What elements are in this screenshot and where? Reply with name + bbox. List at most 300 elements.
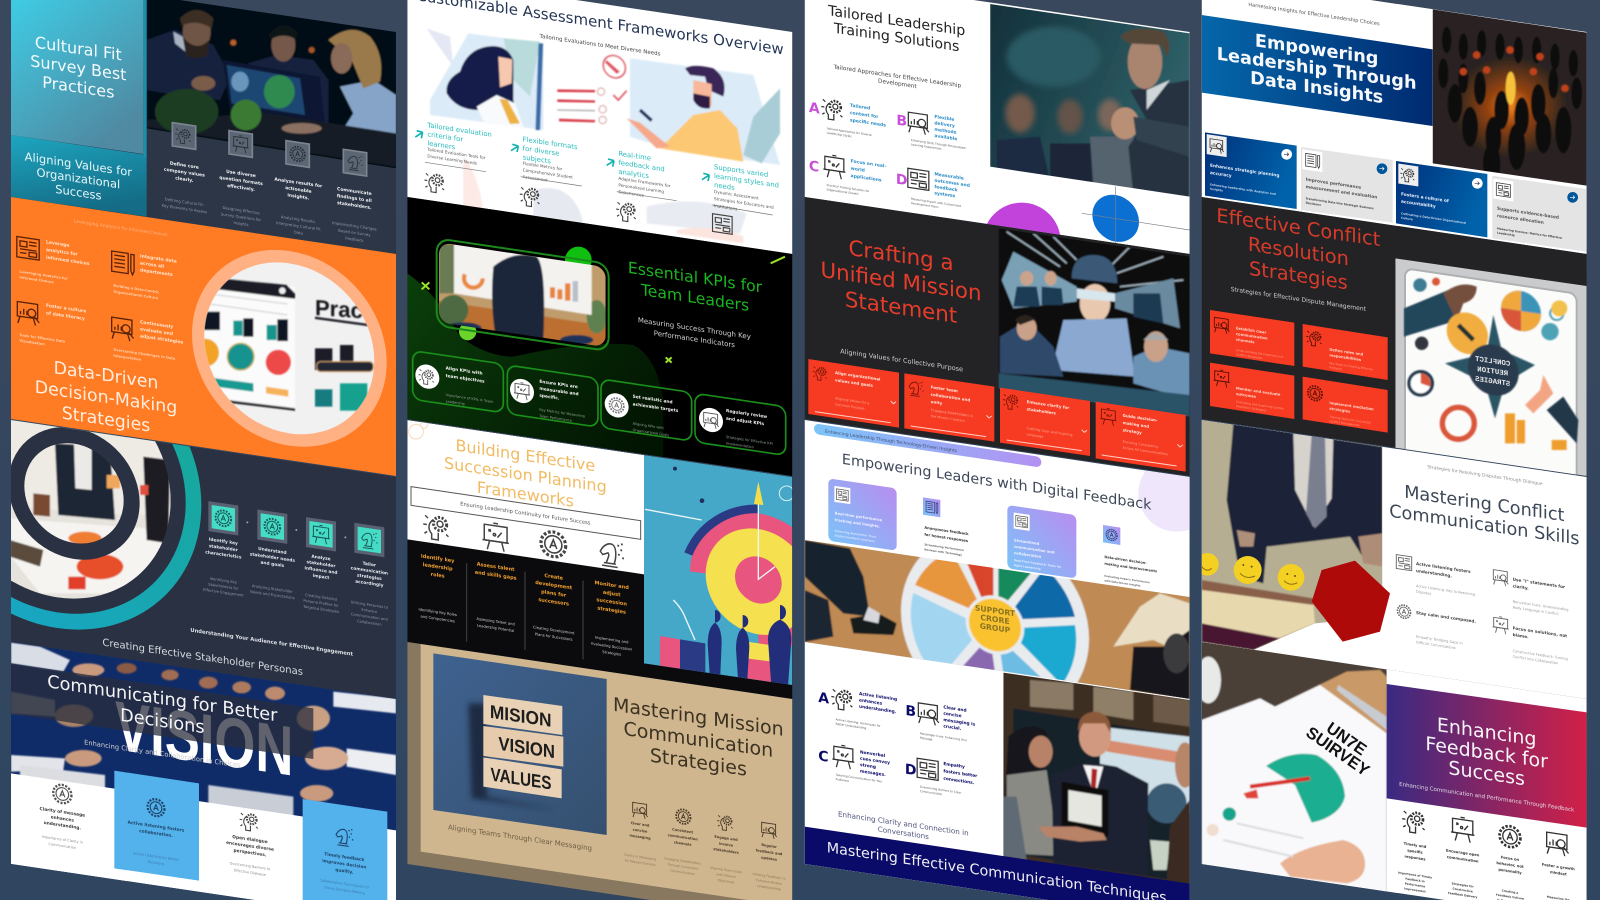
title band: Enhancing Feedback for Success: Success [1448,757,1525,790]
card: Timely feedback: quality. [335,867,353,875]
item: Identify key stakeholder characteristics: stakeholder [209,544,238,553]
slide: Creating Effective Stakeholder Personas [11,420,396,699]
heading: Crafting a Unified Mission Statement: Crafting a [848,236,954,276]
subtitle box: Ensuring Leadership Continuity: Ensuring Leadership Continuity for Future Success [460,501,590,526]
slide: Customizable Assessment Frameworks Overview [400,0,800,267]
item: Engage and involve stakeholders: Engage and [714,835,738,842]
subtitle: Measuring Success: Measuring Success Through Key [638,316,751,341]
heading: Crafting a Unified Mission Statement: Unified Mission [820,257,982,306]
item: Regular feedback and updates: Understanding [757,884,781,891]
item D: Empathy [943,761,965,770]
item: Active listening [1396,555,1475,602]
column: Tailored evaluation criteria: criteria for [427,130,463,143]
item: Continuously evaluate: adjust strategies [140,333,183,345]
photo: Mission Vision Values blocks: VISION [498,733,555,762]
heading: Data-Driven Decision-Making Strategies: Decision-Making [35,377,177,418]
item D: connections. [943,776,974,786]
item: Clear and concise messaging: concise [633,828,647,834]
item: Focus on behavior: behavior, not [1496,861,1524,869]
item B: messaging is [943,717,975,727]
item: Identify key stakeholder characteristics: Identifying Key [210,576,237,585]
column: Assess talent: Leadership Potential [477,623,514,633]
column: Create development plans: development [535,579,572,591]
subtitle: Enhancing Clarity and Collaboration in Choices: Enhancing Clarity and Collaboration in Choices [84,738,241,769]
item: Foster a culture of data literacy: of data literacy [46,310,85,321]
heading: Effective Conflict Resolution Strategies: Strategies [1249,257,1348,294]
column: Monitor and adjust [591,579,632,658]
column: Supports varied learning [702,163,779,234]
item: Understand stakeholder needs and goals: Understand [258,546,287,555]
card: Enhances strategic planning: Insights [1210,187,1223,193]
heading: Data-Driven Decision-Making Strategies: Strategies [62,403,150,436]
card: Real-time performance [828,478,897,551]
column: Real-time feedback [607,149,671,223]
item: Focus on behavior: Focus on [1501,855,1519,862]
card: Real-time performance: Real-time performance [835,511,882,522]
item: Clear and concise messaging: for Mission Success [625,859,655,867]
slide: Empowering Leadership Through Data Insights [1200,0,1600,267]
item A: Better Understanding [836,722,866,730]
item: Leverage analytics: informed choices [46,255,89,266]
heading: Empowering Leaders with Digital Feedback: Empowering Leaders with Digital Feedback [842,451,1151,513]
item: Timely and specific responses: Timely and [1404,841,1426,849]
column: Supports varied learning: learning styles and [714,172,779,189]
column: Tailored evaluation criteria: Tailored evaluation [427,121,492,139]
heading: Communicating for Better Decisions: Communicating for Better [47,671,277,726]
card: Real-time performance: Balancing Anonymity: Trust [835,529,876,538]
card: Establish clear channels: communication [1236,332,1268,341]
decoration: lime marks [422,257,785,363]
item: Data-driven decision-making: making and improvements [1104,562,1157,573]
item C: Audience [836,778,849,783]
item A: Tailored [850,103,870,111]
heading: Cultural Fit Survey Best Practices: Survey Best [30,52,126,84]
item: Integrate data: Building a Data-Centric [113,284,159,294]
slide: Building Effective Succession Planning Frameworks [400,417,827,717]
column: Create development plans: Create [544,572,563,581]
card: Foster team collaboration [904,373,994,442]
item C: Focus on real- [851,158,886,169]
card: Enhance clarity: Language [1027,433,1043,439]
card: Enhance clarity: Crafting Clear and Inspiring [1027,427,1073,437]
item A: content for [850,110,878,120]
column: Monitor and adjust: adjust [603,589,620,598]
item A: specific needs [850,117,886,128]
item: Analyze stakeholder influence and impact [303,519,339,614]
card: Set realistic: Aligning KPIs with [633,422,664,430]
card: Timely feedback: Group Decision-Making [324,885,365,895]
item: Timely and specific responses: responses [1404,854,1426,862]
illustration: conflict resolution poster: STRAGIES [1475,375,1510,388]
item: Tailor communication strategies accordingly [351,525,388,628]
item: Define core company values clearly [162,123,207,214]
item: Encourage open communication: Feedback Delivery [1448,891,1478,899]
card: Align KPIs: Leadership [446,399,465,406]
card: Guide decision-making: Across All Communications [1123,446,1168,456]
item: Regular feedback and updates: Utilizing Feedback to [752,872,786,881]
photo: Mission Vision Values blocks: VALUES [490,763,552,794]
item: Integrate data: Integrate data [140,253,177,264]
photo text: VISION: VISION [115,686,293,791]
item D [905,758,977,799]
item: Timely and specific responses: Importance of Timely [1398,871,1432,880]
item D: Communication [920,790,942,796]
item: Analyze stakeholder influence and impact: Targeted Strategies [303,604,339,614]
card: Regularly review: Implementation [726,441,754,449]
item: Define core company values clearly: Defining Cultural Fit: [165,197,204,207]
card: Ensure KPIs: Ensure KPIs are [539,379,578,390]
subtitle: Tailoring Evaluations: Tailoring Evaluations to Meet Diverse Needs [539,33,660,57]
slide: Enhancing Feedback for Success [1196,637,1600,900]
item: Tailor communication strategies accordingly: strategies [357,573,382,582]
heading: Effective Conflict Resolution Strategies: Effective Conflict [1216,204,1380,251]
background: green blob [407,273,663,483]
item C: cues convey [860,756,890,765]
item C: C [818,747,828,765]
card: Streamlined communication: Streamlined [1014,538,1039,546]
item: Integrate data [112,251,177,300]
photo: pointing leader [990,0,1190,200]
column: Flexible formats: Flexible formats [523,135,577,151]
card: Open dialogue [226,813,274,878]
item: Identify key stakeholder characteristics: Stakeholders for [208,582,239,591]
column: Tailored evaluation criteria: Tailored Evaluation Tools for [427,147,485,160]
column: Monitor and adjust: Evaluating Succession [591,641,632,652]
item: Consistent communication channels: Engaging Stakeholders [664,857,701,866]
item: Stay calm: Empathy: Bridging Gaps in [1416,635,1463,646]
card: Clarity of message: Importance of Clarity in [42,835,83,845]
heading: Mastering Conflict Communication Skills: Mastering Conflict [1404,481,1564,526]
card: Implement mediation [1303,377,1388,433]
card: Foster team collaboration: collaboration and [931,392,970,403]
column: Monitor and adjust: Monitor and [595,579,629,591]
item C: C [809,157,819,175]
card: Open dialogue: perspectives. [234,848,266,858]
item: Anonymous feedback: Anonymous feedback [924,525,969,536]
item: Analyze results for actionable insights: Analyze results for [274,176,322,189]
item A: Leadership Styles [827,131,852,138]
subtitle: Tailored Approaches: Tailored Approaches for Effective Leadership [834,64,961,89]
item: Consistent communication channels [664,808,701,877]
slide: Crafting a Unified Mission Statement [800,183,1200,483]
card: Clarity of message [40,784,85,851]
item: Tailor communication strategies accordingly: Utilizing Personas to [351,600,388,610]
card: Align KPIs: team objectives [446,373,485,384]
slide: Mastering Conflict Communication Skills [1196,417,1600,717]
slide: Mastering Effective Communication Techniques [800,637,1200,900]
slide: Empowering Leaders with Digital Feedback [800,417,1215,733]
item: Focus on behavior: Creating a [1502,889,1518,895]
item: Clear and concise messaging [624,802,656,867]
column: Flexible formats: Flexible Metrics for [523,161,562,172]
item C: messages. [860,769,886,777]
item: Engage and involve stakeholders [710,815,742,886]
column: Supports varied learning: Supports varied [714,163,768,179]
item: Use diverse question formats effectively: Survey Questions for [221,212,261,222]
heading: Mastering Conflict Communication Skills: Communication Skills [1389,501,1579,549]
heading: Essential KPIs for Team Leaders: Essential KPIs for [628,258,762,297]
card: Establish clear channels: Understanding the Importance of [1236,349,1283,359]
card: Ensure KPIs [507,365,598,427]
item: Anonymous feedback: Streamlining Performance [924,543,964,552]
item: Active listening: Active listening fosters [1416,561,1471,574]
card: Timely feedback: improves decision [322,858,366,870]
column: Identify key leadership roles: Identifying Key Roles [419,607,457,617]
card: Implement mediation: Training Teams for Successful [1329,415,1371,425]
item A: Active listening [859,691,897,702]
card: Monitor and evaluate: outcomes [1236,392,1256,399]
card: Open dialogue: Overcoming Barriers to [230,861,270,871]
item: Active listening: Disputes [1416,590,1431,596]
photo: survey on clipboard: UN7E [1323,718,1370,759]
item: Engage and involve stakeholders: Aligning Team Goals [710,866,742,874]
subtitle: Aligning Values for Collective Purpose: Aligning Values for Collective Purpose [840,347,963,373]
column: Identify key leadership roles: and Competencies [421,614,455,624]
item: Understand stakeholder needs and goals: and goals [260,560,284,568]
heading: Creating Effective Stakeholder Personas: Creating Effective Stakeholder Personas [102,636,303,678]
item D: systems [934,190,955,199]
column: Real-time feedback: analytics [618,167,649,180]
subtitle: Understanding Your Audience: Understanding Your Audience for Effective Engagement [190,627,353,657]
item: Consistent communication channels: Consistent [672,827,693,835]
subtitle: Harnessing Insights: Harnessing Insights for Effective Leadership Choices [1248,1,1380,27]
column: Monitor and adjust: succession [596,596,627,607]
card: Define roles: Protocols [1329,366,1342,371]
slide: Effective Conflict Resolution Strategies [1200,183,1600,500]
card: Foster team collaboration: Foster team [931,385,958,393]
item: Foster a culture of data literacy: Foster a culture [46,303,86,314]
card: Clarity of message: Communication [49,842,76,850]
card: Define roles: Define roles and [1329,347,1363,357]
card: Monitor and evaluate: Resolution Strategies [1236,405,1266,412]
item: Communicate findings to all stakeholders: Feedback [345,236,364,243]
item: Data-driven decision-making: Data-driven decision- [1104,555,1147,565]
item: Clear and concise messaging: Clarity in Messaging [624,853,656,861]
card: Establish clear channels: Conflict Resolution [1236,353,1262,360]
item D: Measurable [934,171,964,181]
item: Stay calm: Difficult Conversations [1416,640,1456,650]
heading: Building Effective Succession Planning Frameworks: Building Effective [455,436,595,475]
item: Leverage analytics [17,237,89,287]
item: Consistent communication channels: channels [674,840,691,847]
item D: Development Plans [911,202,939,209]
heading: Mastering Mission Communication Strategies: Strategies [650,744,747,781]
heading: Crafting a Unified Mission Statement: Statement [845,287,957,328]
card: Align KPIs: Align KPIs with [446,366,483,376]
column: Monitor and adjust: Strategies [602,650,621,657]
decoration: purple half circle and blue target [983,187,1190,281]
photo: award presentation [1000,667,1195,893]
card: Align KPIs: Importance of KPIs in Team [446,393,493,404]
photo: Mission Vision Values blocks: MISION [490,701,552,731]
card: Align organizational values: Aligning Values for a [835,397,869,405]
item B: methods [934,127,956,135]
card: Open dialogue: Effective Dialogue [234,868,266,877]
slide: Communicating for Better Decisions [0,637,400,900]
icons row [423,515,623,568]
subtitle: Tailored Approaches: Development [878,77,917,90]
card: Fosters a culture: Cultivating a Data-Driven Organizational [1401,212,1466,225]
item: Analyze stakeholder influence and impact: Analyze [311,554,331,562]
subtitle box: Ensuring Leadership Continuity [411,487,641,539]
subtitle: Enhancing Clarity and Connection: Conversations [878,825,929,841]
card: Timely feedback [303,799,387,900]
item D: Measuring Impact with Customized [911,197,961,208]
card: Timely feedback: Collaborative Techniques for [319,878,369,890]
item: Analyze stakeholder influence and impact: stakeholder [306,560,336,569]
card: Ensure KPIs: measurable and [539,386,579,397]
item: Encourage open communication: Constructive [1453,887,1473,894]
item C: Nonverbal [860,750,885,758]
item D: outcomes and [934,178,970,188]
item: Identify key stakeholder characteristics: characteristics [205,550,241,560]
illustration: assessment scene [427,28,780,243]
item: Consistent communication channels: Communication [670,869,695,876]
column: Supports varied learning: Dynamic Assessment [714,189,759,201]
photo: support group circle chart: SUPPORT [975,604,1015,618]
column: Create development plans: Creating Development [533,625,574,635]
item: Identify key stakeholder characteristics: Effective Engagement [203,587,244,598]
column: Assess talent [475,561,517,633]
item: Tailor communication strategies accordingly: Tailor [363,561,376,568]
column: Real-time feedback: Experiences [618,189,644,198]
shape: red heptagon [1312,561,1390,642]
card: Supports evidence-based: Supports evidence-based [1497,206,1559,220]
heading: Data-Driven Decision-Making Strategies: Data-Driven [54,358,158,393]
card: Align organizational values: Common Purpose [835,403,864,411]
item: Clear and concise messaging: messaging [629,833,651,841]
item: Data-driven decision-making: with Data-Driven Insights [1104,579,1141,587]
card: Clarity of message: Clarity of message [40,806,85,818]
item: Timely and specific responses: Performance [1405,882,1425,889]
column: Monitor and adjust: strategies [597,605,626,615]
item B: concise [943,711,962,719]
item: Data-driven decision-making: Evaluating Impact: Performance [1104,574,1150,584]
card: Align organizational values: Align organizational [835,370,880,382]
card: Open dialogue: encourages diverse [226,840,274,852]
item: Encourage open communication: communication [1447,855,1478,864]
item: Identify key stakeholder characteristics: Identify key [209,537,238,546]
item: Regular feedback and updates [752,822,786,892]
title band: Enhancing Feedback for Success: Enhancing Communication and Performance Through Feedback [1399,781,1574,813]
item: Use diverse question formats effectively: effectively. [227,183,255,192]
item: Timely and specific responses [1398,811,1432,895]
card: Enhance clarity: stakeholders [1027,407,1056,416]
item: Analyze results for actionable insights [274,141,322,238]
column: Assess talent: Assess talent [477,561,515,572]
card: Enhance clarity: Enhance clarity for [1027,399,1069,410]
photo: glowing leader among crowd [1430,7,1590,190]
card: Define roles [1303,324,1388,380]
item B: Learning Experiences [911,143,942,151]
item: Integrate data: across all [140,260,164,269]
card: Enhance clarity [1000,388,1090,456]
card: Foster team collaboration: the Mission Creation [931,414,965,423]
item: Integrate data: departments [140,267,173,278]
column: Monitor and adjust: Implementing and [595,635,628,644]
card: Guide decision-making: making and [1123,420,1149,429]
slide: Tailored Leadership Training Solutions [800,0,1200,281]
card: Guide decision-making: Ensuring Consistency [1123,440,1158,449]
item: Define core company values clearly: Define core [170,161,199,170]
pill: Enhancing Leadership Through Technology-Driven Insights: Enhancing Leadership Through Technology-Driven Insights [825,429,957,454]
item: Communicate findings to all stakeholders: stakeholders. [337,200,372,211]
item: Analyze stakeholder influence and impact: Creating Detailed [305,593,337,602]
item B [896,112,965,154]
title band: Enhancing Feedback for Success [1387,684,1587,828]
item D: D [905,760,916,779]
card: Foster team collaboration: Engaging Stakeholders in [931,408,973,418]
illustration: target and team [644,450,827,690]
item B: B [905,702,916,720]
card: Define roles: Key Steps in Creating Effective [1329,362,1373,371]
item: Understand stakeholder needs and goals: stakeholder needs [250,552,295,563]
card: Improves performance: Decisions [1306,201,1321,207]
item B [905,702,975,747]
item: Anonymous feedback: Reviews with Technology [924,548,962,557]
column: Create development plans [533,571,575,642]
item: Analyze results for actionable insights: Analyzing Results: [281,214,316,224]
card: Guide decision-making [1096,402,1186,472]
card: Fosters a culture: Culture [1401,216,1413,221]
card: Guide decision-making: strategy [1123,428,1142,435]
item A: Tailored Approaches for Diverse [827,127,872,137]
item: Use I statements: Nonverbal Cues: Understanding [1513,600,1568,612]
item: Leverage analytics: analytics for [46,247,78,257]
item: Integrate data: Organizational Culture [113,290,158,300]
item: Stay calm: Stay calm and composed. [1416,610,1476,624]
item: Define core company values clearly: company values [164,167,205,178]
item: Continuously evaluate [112,317,183,367]
card: Regularly review [695,393,786,455]
card: Define roles: responsibilities [1329,353,1361,362]
item: Analyze stakeholder influence and impact: impact [313,573,329,581]
column: Tailored evaluation criteria [415,121,492,194]
card: Active listening: collaboration. [139,828,173,839]
column: Flexible formats [511,135,577,208]
subtitle: Aligning Values for Organizational Success: Organizational [36,166,120,192]
card: Supports evidence-based: Leadership [1497,231,1515,237]
item: Continuously evaluate: Interpretation [113,354,141,362]
item: Continuously evaluate: Overcoming Challenges in Data [113,348,175,361]
photo: Mission Vision Values blocks [433,653,607,835]
card: Fosters a culture: accountability [1401,199,1436,209]
column: Supports varied learning: Strategies for Educators and [714,196,774,210]
item: Use diverse question formats effectively: question formats [219,175,263,187]
item: Focus on solutions: blame. [1513,632,1529,639]
item: Engage and involve stakeholders: with Mission [716,873,736,879]
item A [818,689,897,732]
card: Foster team collaboration: unity [931,399,942,406]
card: Implement mediation: Conflict Management [1329,420,1360,428]
heading: Building Effective Succession Planning Frameworks: Succession Planning [444,454,607,496]
item D: feedback [934,184,958,193]
column: Create development plans: successors [538,596,569,607]
item: Continuously evaluate: evaluate and [140,326,173,337]
item: Focus on solutions: Focus on solutions, not [1513,625,1567,638]
card: Implement mediation: Implement mediation [1329,401,1374,412]
item: Focus on solutions [1493,616,1568,667]
card: Active listening: Decisions [148,860,164,866]
item A: A [809,99,820,117]
card: Align KPIs [413,351,503,413]
item: Active listening: understanding. [1416,568,1452,578]
item C: Practical Training Solutions for [827,184,870,193]
card: Supports evidence-based: Measuring Success: Metrics for Effective [1497,227,1562,240]
heading: Cultural Fit Survey Best Practices: Practices [42,73,114,102]
heading: Tailored Leadership Training Solutions: Tailored Leadership [828,3,965,39]
item: Communicate findings to all stakeholders [332,149,377,245]
